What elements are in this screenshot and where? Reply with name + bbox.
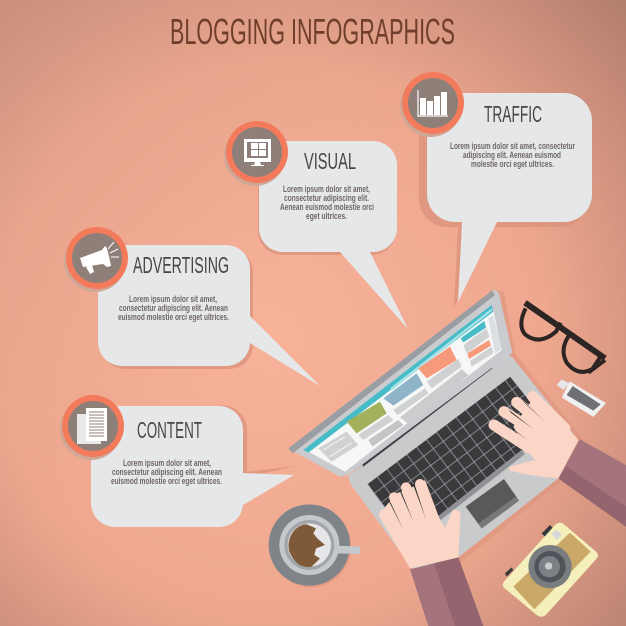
icon: monitor bbox=[224, 121, 288, 186]
heading: advertising: ADVERTISING bbox=[133, 252, 229, 278]
sleeve: left arm bbox=[410, 557, 483, 626]
text: advertising: consectetur adipiscing elit. Aenean bbox=[119, 303, 228, 313]
text: traffic bbox=[450, 141, 575, 169]
laptop bbox=[288, 290, 583, 573]
panel: content bbox=[60, 395, 295, 527]
panel: traffic bbox=[400, 72, 592, 307]
text: visual bbox=[280, 184, 374, 221]
laptop shadow bbox=[348, 290, 583, 573]
laptop base bbox=[348, 355, 578, 569]
laptop lid bbox=[288, 290, 512, 477]
icon: coffee cup bbox=[269, 504, 360, 587]
text: advertising bbox=[118, 294, 229, 322]
bubble: advertising bbox=[101, 248, 253, 369]
keyboard bbox=[367, 377, 551, 540]
bubble: content bbox=[91, 406, 295, 478]
icon: camera bbox=[503, 523, 598, 617]
hand: right bbox=[494, 393, 578, 478]
icon: documents bbox=[60, 395, 124, 460]
icon: bar chart bbox=[400, 72, 464, 137]
icon: usb drive bbox=[557, 379, 605, 416]
heading: traffic: TRAFFIC bbox=[484, 101, 542, 127]
trackpad bbox=[466, 479, 519, 528]
hand: left bbox=[378, 480, 461, 568]
icon: glasses bbox=[521, 303, 605, 373]
bubble: traffic bbox=[419, 98, 588, 307]
text: visual: Aenean euismod molestie orci bbox=[280, 202, 374, 212]
text: content: Lorem ipsum dolor sit amet, bbox=[123, 458, 211, 468]
text: content: consectetur adipiscing elit. Aenean bbox=[112, 467, 222, 477]
text: traffic: Lorem ipsum dolor sit amet, consectetur bbox=[450, 141, 575, 151]
text: advertising: euismod molestie orci eget ultrices. bbox=[118, 312, 229, 322]
text: traffic: adipiscing elit. Aenean euismod bbox=[463, 150, 561, 160]
text: visual: eget ultrices. bbox=[306, 211, 347, 221]
panel: visual bbox=[224, 121, 408, 329]
text: visual: Lorem ipsum dolor sit amet, bbox=[283, 184, 370, 194]
icon: megaphone bbox=[64, 227, 128, 292]
text: content: euismod molestie orci eget ultrices. bbox=[111, 476, 222, 486]
screen bbox=[303, 305, 502, 472]
heading: content: CONTENT bbox=[137, 417, 202, 443]
sleeve: right arm bbox=[558, 439, 626, 527]
text: content bbox=[111, 458, 222, 486]
panel: advertising bbox=[64, 227, 320, 386]
bubble: visual bbox=[258, 144, 396, 255]
heading: visual: VISUAL bbox=[304, 148, 356, 174]
text: traffic: molestie orci eget ultrices. bbox=[471, 159, 554, 169]
text: advertising: Lorem ipsum dolor sit amet, bbox=[129, 294, 217, 304]
text: visual: consectetur adipiscing elit. bbox=[284, 193, 369, 203]
